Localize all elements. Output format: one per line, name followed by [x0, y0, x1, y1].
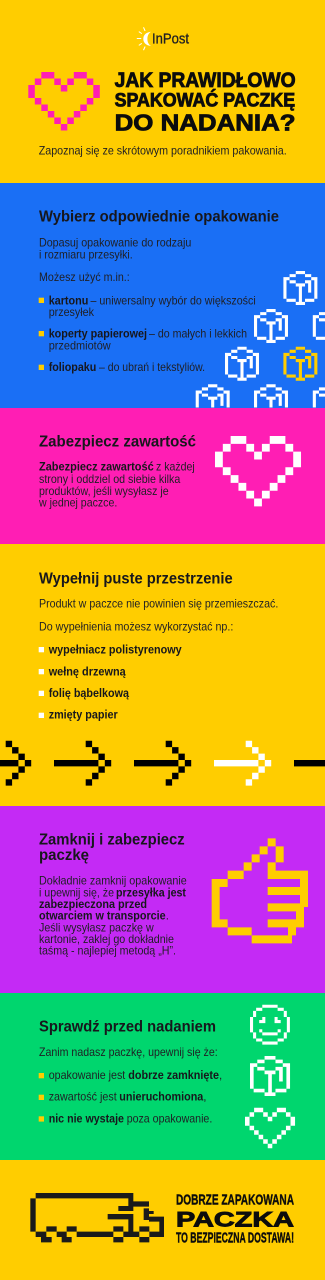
list: packaging types: – uniwersalny wybór do większości: [90, 294, 256, 307]
body text: [39, 598, 278, 634]
list: fillers: folię bąbelkową: [49, 687, 130, 700]
title: SPAKOWAĆ PACZKĘ: [115, 90, 295, 112]
title: JAK PRAWIDŁOWO: [115, 69, 296, 92]
intro text: Możesz użyć m.in.:: [39, 271, 130, 284]
panel: close and secure: [0, 806, 325, 993]
list: checks: dobrze zamknięte: [128, 1069, 220, 1082]
body text: Zabezpiecz zawartość: [39, 461, 154, 474]
body text: Produkt w paczce nie powinien się przemieszczać.: [39, 598, 278, 611]
list: checks: ,: [203, 1091, 207, 1104]
list: fillers: zmięty papier: [49, 709, 118, 722]
title: DO NADANIA?: [115, 109, 296, 135]
icon: pixel thumbs up: [212, 838, 308, 943]
icon: pixel truck: [30, 1193, 164, 1242]
closing slogan: [176, 1191, 294, 1246]
list: fillers: wełnę drzewną: [48, 665, 126, 678]
heading: Wybierz odpowiednie opakowanie: [39, 209, 279, 226]
heading: paczkę: [39, 847, 89, 864]
icon: pixel heart: [245, 1108, 295, 1148]
icon: white pixel heart: [215, 436, 301, 506]
icon: pixel box: [250, 1056, 290, 1096]
list: fillers: wypełniacz polistyrenowy: [48, 644, 182, 657]
list: packaging types: przesyłek: [49, 306, 94, 319]
icon: sun crescent: [137, 27, 151, 50]
subtitle: Zapoznaj się ze skrótowym poradnikiem pakowania.: [39, 144, 287, 157]
panel: fill empty space: [0, 544, 325, 806]
closing slogan: PACZKA: [176, 1208, 294, 1232]
heading: Sprawdź przed nadaniem: [39, 1019, 216, 1036]
heading: Zabezpiecz zawartość: [39, 434, 196, 451]
body text: z każdej: [156, 461, 195, 474]
logo: InPost: InPost: [152, 32, 189, 48]
list: checks: poza opakowanie.: [127, 1112, 212, 1125]
body text: Do wypełnienia możesz wykorzystać np.:: [39, 621, 233, 634]
panel: secure contents: [0, 408, 325, 544]
list: checks: unieruchomiona: [119, 1091, 204, 1104]
body text: .: [166, 910, 169, 923]
body text: Dokładnie zamknij opakowanie: [39, 874, 187, 887]
heading: Wypełnij puste przestrzenie: [39, 570, 233, 587]
body text: i upewnij się, że: [39, 886, 114, 899]
list: packaging types: koperty papierowej: [49, 328, 147, 341]
icon: pixel smiley: [250, 1005, 290, 1045]
body text: [39, 874, 187, 957]
body text: kartonie, zaklej go dokładnie: [39, 933, 174, 946]
heading: Zamknij i zabezpiecz: [39, 831, 185, 848]
list: packaging types: [39, 294, 256, 374]
body text: [38, 461, 195, 509]
body text: strony i oddziel od siebie kilka: [39, 473, 181, 486]
body text: produktów, jeśli wysyłasz je: [39, 485, 169, 498]
list: checks: ,: [219, 1069, 222, 1082]
logo: InPost: [137, 27, 189, 50]
heading: [39, 831, 185, 864]
body text: Jeśli wysyłasz paczkę w: [39, 921, 154, 934]
icon: pink pixel heart: [28, 72, 100, 130]
body text: taśmą - najlepiej metodą „H”.: [39, 944, 176, 957]
list: packaging types: kartonu: [49, 294, 88, 307]
list: checks: [39, 1069, 222, 1125]
list: checks: opakowanie jest: [49, 1069, 126, 1082]
list: packaging types: przedmiotów: [49, 339, 111, 352]
panel: check before sending: [0, 993, 325, 1160]
body text: Zanim nadasz paczkę, upewnij się że:: [39, 1046, 218, 1059]
body text: zabezpieczona przed: [39, 898, 147, 911]
panel: choose packaging: [0, 183, 325, 408]
body text: przesyłka jest: [116, 886, 186, 899]
body text: w jednej paczce.: [38, 496, 117, 509]
list: packaging types: – do małych i lekkich: [149, 328, 247, 341]
list: fillers: [39, 644, 182, 722]
body text: otwarciem w transporcie: [39, 910, 166, 923]
panel: closing banner: [0, 1160, 325, 1280]
arrows row: [0, 741, 325, 786]
list: checks: nic nie wystaje: [49, 1112, 125, 1125]
list: packaging types: – do ubrań i tekstyliów.: [99, 361, 205, 374]
icons: pixel boxes: [196, 271, 325, 407]
intro text: i rozmiaru przesyłki.: [39, 248, 133, 261]
list: packaging types: foliopaku: [49, 361, 96, 374]
intro text: Dopasuj opakowanie do rodzaju: [39, 236, 191, 249]
panel: intro: [0, 0, 325, 183]
title: [115, 69, 296, 135]
intro text: [39, 236, 191, 284]
list: checks: zawartość jest: [49, 1091, 117, 1104]
